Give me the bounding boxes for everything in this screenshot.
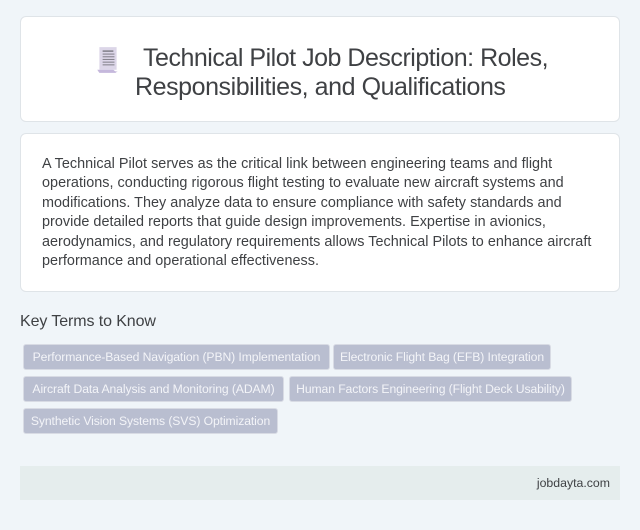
heading: key terms: Key Terms to Know [20,313,156,330]
description text: modifications. They analyze data to ensure compliance with safety standards and [42,195,562,211]
description text: aerodynamics, and regulatory requirements allows Technical Pilots to enhance aircraft [42,234,591,250]
description panel [20,133,620,292]
header panel [20,16,620,122]
tag: human factors [289,376,572,402]
key term tags [23,344,572,434]
description text: A Technical Pilot serves as the critical link between engineering teams and flight [42,156,552,172]
title: Responsibilities, and Qualifications [135,73,505,101]
title: Technical Pilot Job Description: Roles, [143,44,548,72]
description text: performance and operational effectiveness. [42,253,319,269]
tag: ADAM [23,376,284,402]
tag: SVS: Synthetic Vision Systems (SVS) Optimization [31,414,270,428]
tag: PBN: Performance-Based Navigation (PBN) Implementation [33,350,320,364]
icon: document scroll [97,47,118,73]
tag: EFB: Electronic Flight Bag (EFB) Integration [340,350,544,364]
title [135,44,548,101]
footer source text: jobdayta.com [537,476,610,490]
description text [42,156,592,269]
description text: provide detailed reports that guide design improvements. Expertise in avionics, [42,214,546,230]
tag: human factors: Human Factors Engineering (Flight Deck Usability) [296,382,565,396]
tag: SVS [23,408,278,434]
tag: PBN [23,344,330,370]
description text: operations, conducting rigorous flight testing to evaluate new aircraft systems and [42,175,564,191]
tag: ADAM: Aircraft Data Analysis and Monitoring (ADAM) [32,382,275,396]
tag: EFB [333,344,551,370]
footer bar [20,466,620,500]
